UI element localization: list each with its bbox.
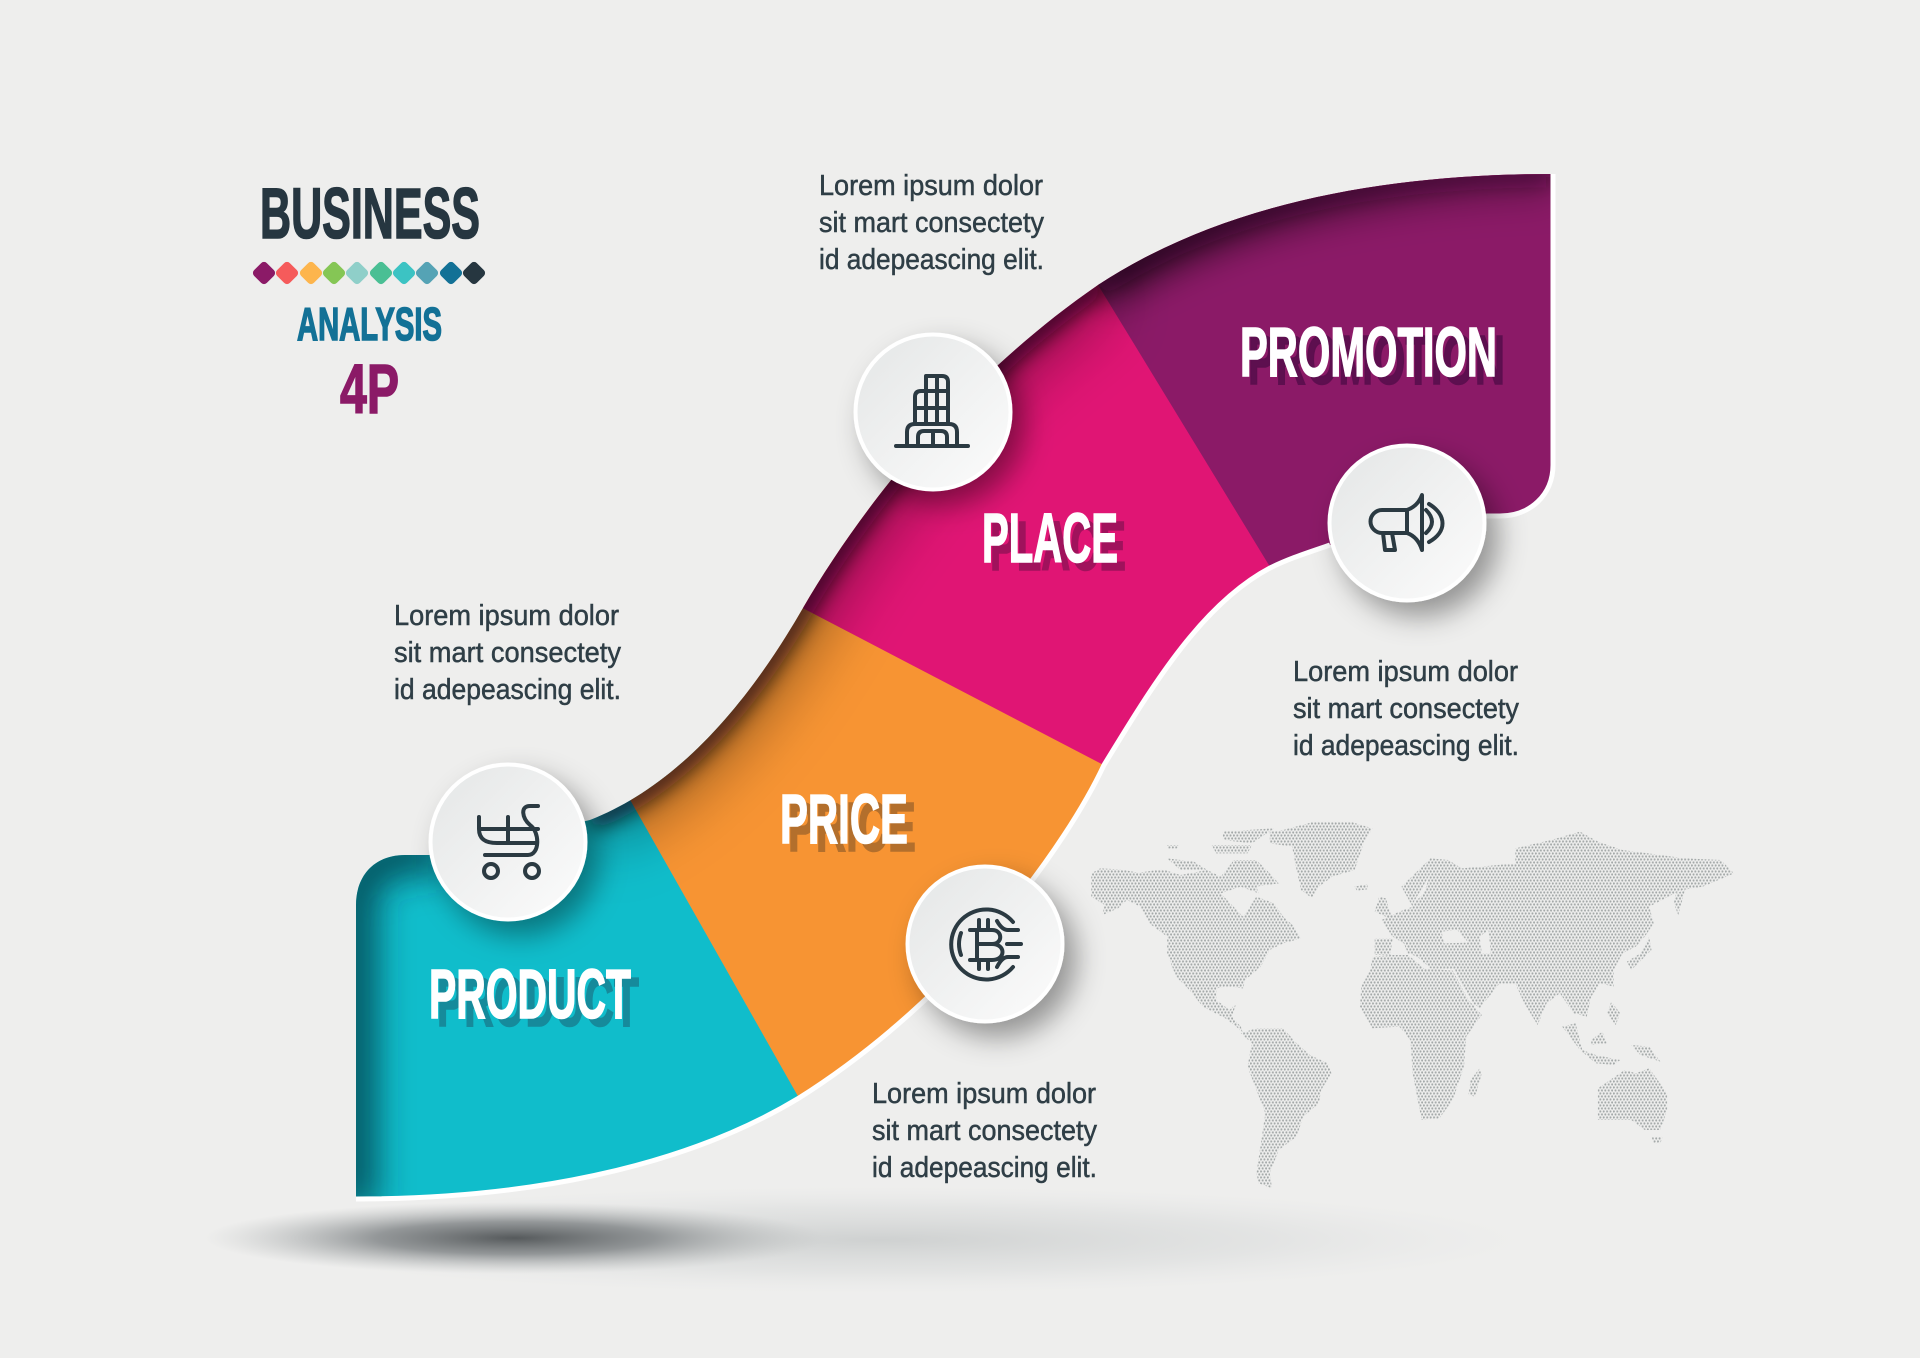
ground shadow	[205, 1186, 1530, 1294]
text block: promotion	[1293, 656, 1519, 762]
eurasia	[1381, 832, 1734, 1025]
label: promotion: PROMOTION	[1248, 321, 1505, 399]
segment: place	[803, 174, 1550, 764]
icon circle: product	[430, 764, 586, 920]
world map	[1091, 822, 1734, 1188]
white edge	[356, 174, 1553, 1199]
kamchatka	[1674, 890, 1685, 915]
icon: megaphone	[1370, 495, 1442, 550]
text block: price: Lorem ipsum dolor	[872, 1078, 1096, 1110]
segment: price	[630, 480, 1102, 1096]
label: product	[429, 955, 639, 1041]
text block: place	[819, 170, 1044, 276]
text block: price: id adepeascing elit.	[872, 1152, 1097, 1184]
subtitle: 4P: 4P	[340, 350, 399, 428]
label: price	[780, 780, 916, 866]
icon circle: promotion	[1330, 446, 1484, 600]
icon: bitcoin	[951, 909, 1021, 980]
label: promotion	[1240, 313, 1505, 399]
label: promotion: PROMOTION	[1240, 313, 1497, 391]
title: business: BUSINESS	[260, 175, 480, 254]
diamond row	[251, 260, 487, 286]
text block: promotion: sit mart consectety	[1293, 693, 1519, 725]
iberia	[1375, 938, 1393, 955]
north america	[1091, 860, 1301, 1033]
arctic islands	[1167, 828, 1274, 870]
text block: place: id adepeascing elit.	[819, 244, 1044, 276]
text block: product: Lorem ipsum dolor	[394, 600, 619, 632]
greenland	[1270, 822, 1372, 898]
subtitle: analysis: ANALYSIS	[297, 298, 442, 350]
text block: price: sit mart consectety	[872, 1115, 1097, 1147]
icon: building	[896, 376, 968, 446]
africa	[1360, 955, 1482, 1120]
text block: place: Lorem ipsum dolor	[819, 170, 1043, 202]
text block: promotion: Lorem ipsum dolor	[1293, 656, 1518, 688]
label: product: PRODUCT	[429, 955, 631, 1033]
label: place: PLACE	[982, 499, 1118, 577]
segment: promotion	[1098, 174, 1550, 566]
southeast asia islands	[1562, 1002, 1660, 1065]
icon circle: price	[908, 866, 1062, 1022]
label: place	[982, 499, 1126, 585]
label: price: PRICE	[780, 780, 908, 858]
tasmania	[1651, 1137, 1663, 1143]
text block: product: id adepeascing elit.	[394, 674, 621, 706]
south america	[1241, 1028, 1331, 1188]
britain	[1375, 897, 1393, 920]
iceland	[1355, 884, 1368, 891]
japan	[1627, 937, 1651, 970]
text block: place: sit mart consectety	[819, 207, 1044, 239]
inner shadow	[356, 174, 1553, 1210]
label: price: PRICE	[788, 788, 916, 866]
text block: product	[394, 600, 621, 706]
title block	[251, 175, 487, 428]
label: place: PLACE	[990, 507, 1126, 585]
madagascar	[1468, 1068, 1482, 1097]
label: product: PRODUCT	[437, 963, 639, 1041]
australia	[1598, 1068, 1667, 1130]
text block: promotion: id adepeascing elit.	[1293, 730, 1519, 762]
ribbon segments	[356, 174, 1550, 1196]
text block: price	[872, 1078, 1097, 1184]
text block: product: sit mart consectety	[394, 637, 621, 669]
icon: shopping cart	[479, 806, 539, 878]
icon circle: place	[856, 334, 1010, 490]
inland seas	[1413, 873, 1491, 953]
segment: product	[356, 700, 798, 1196]
panel: 4P ribbon	[356, 174, 1556, 1202]
